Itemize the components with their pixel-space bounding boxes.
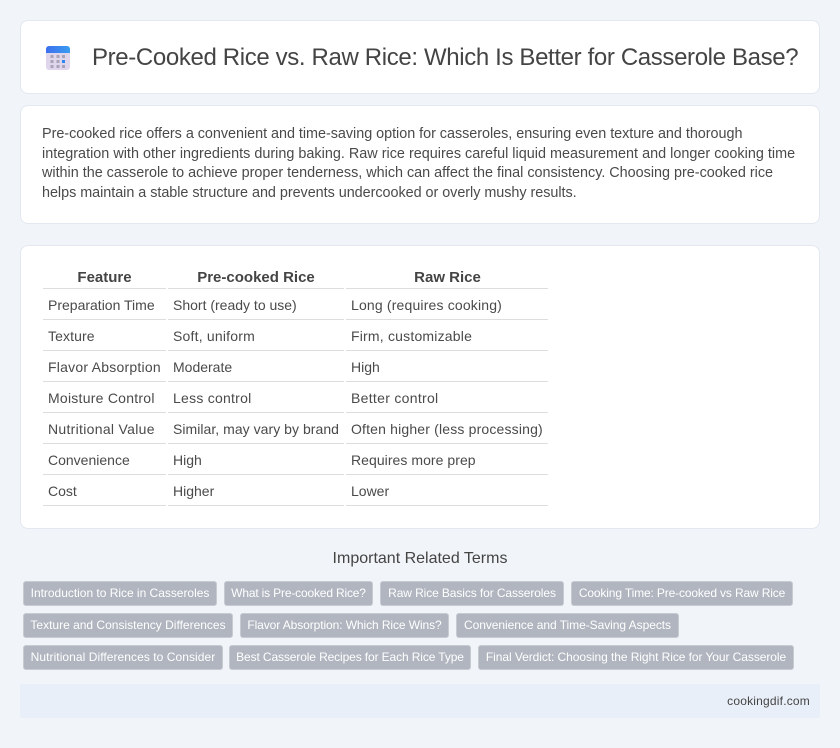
comparison table: Lower [351, 483, 389, 499]
tag [224, 581, 373, 606]
intro paragraph: Pre-cooked rice offers a convenient and time-saving option for casseroles, ensuring even texture and thorough [42, 126, 742, 142]
intro paragraph: within the casserole to achieve proper tenderness, which can affect the final consistency. Choosing pre-cooked rice [42, 165, 773, 181]
intro paragraph: helps maintain a stable structure and prevents undercooked or overly mushy results. [42, 185, 577, 201]
icon: calendar [46, 46, 70, 70]
tag [23, 613, 233, 638]
comparison table: Often higher (less processing) [351, 421, 543, 437]
comparison table: Higher [173, 483, 214, 499]
comparison table panel [20, 245, 820, 529]
comparison table: Long (requires cooking) [351, 297, 502, 313]
comparison table: Cost [48, 483, 77, 499]
tag: Nutritional Differences to Consider [31, 650, 215, 664]
comparison table: Convenience [48, 452, 130, 468]
table header: Feature [77, 269, 132, 286]
comparison table: High [351, 359, 380, 375]
comparison table: Short (ready to use) [173, 297, 297, 313]
intro paragraph [42, 126, 795, 201]
comparison table: Better control [351, 390, 438, 406]
comparison table: High [173, 452, 202, 468]
related terms tags [23, 581, 794, 670]
tag [240, 613, 449, 638]
comparison table: Firm, customizable [351, 328, 472, 344]
tag [23, 645, 223, 670]
tag: Final Verdict: Choosing the Right Rice for Your Casserole [486, 650, 786, 664]
tag [478, 645, 794, 670]
comparison table: Moderate [173, 359, 232, 375]
tag [571, 581, 793, 606]
comparison table: Similar, may vary by brand [173, 421, 339, 437]
title: Pre-Cooked Rice vs. Raw Rice: Which Is Better for Casserole Base? [92, 44, 798, 71]
comparison table: Less control [173, 390, 251, 406]
footer source: cookingdif.com [727, 694, 810, 708]
tag: Raw Rice Basics for Casseroles [388, 586, 556, 600]
table header [77, 269, 481, 286]
table header: Raw Rice [414, 269, 481, 286]
tag: Cooking Time: Pre-cooked vs Raw Rice [579, 586, 785, 600]
tag: What is Pre-cooked Rice? [231, 586, 366, 600]
tag [380, 581, 564, 606]
table header: Pre-cooked Rice [197, 269, 315, 286]
tag: Best Casserole Recipes for Each Rice Type [236, 650, 464, 664]
intro paragraph: integration with other ingredients during baking. Raw rice requires careful liquid measurement and longer cooking time [42, 146, 795, 162]
comparison table: Preparation Time [48, 297, 155, 313]
footer bar [20, 684, 820, 718]
comparison table: Flavor Absorption [48, 359, 161, 375]
comparison table [43, 269, 548, 506]
intro text panel [20, 105, 820, 224]
comparison table: Soft, uniform [173, 328, 255, 344]
tag [456, 613, 679, 638]
comparison table: Requires more prep [351, 452, 476, 468]
tag [229, 645, 471, 670]
related terms heading: Important Related Terms [333, 550, 507, 567]
tag: Introduction to Rice in Casseroles [31, 586, 209, 600]
comparison table: Texture [48, 328, 95, 344]
tag: Convenience and Time-Saving Aspects [464, 618, 671, 632]
comparison table: Moisture Control [48, 390, 155, 406]
tag: Flavor Absorption: Which Rice Wins? [247, 618, 442, 632]
comparison table: Nutritional Value [48, 421, 155, 437]
tag [23, 581, 217, 606]
tag: Texture and Consistency Differences [30, 618, 226, 632]
header card [20, 20, 820, 94]
